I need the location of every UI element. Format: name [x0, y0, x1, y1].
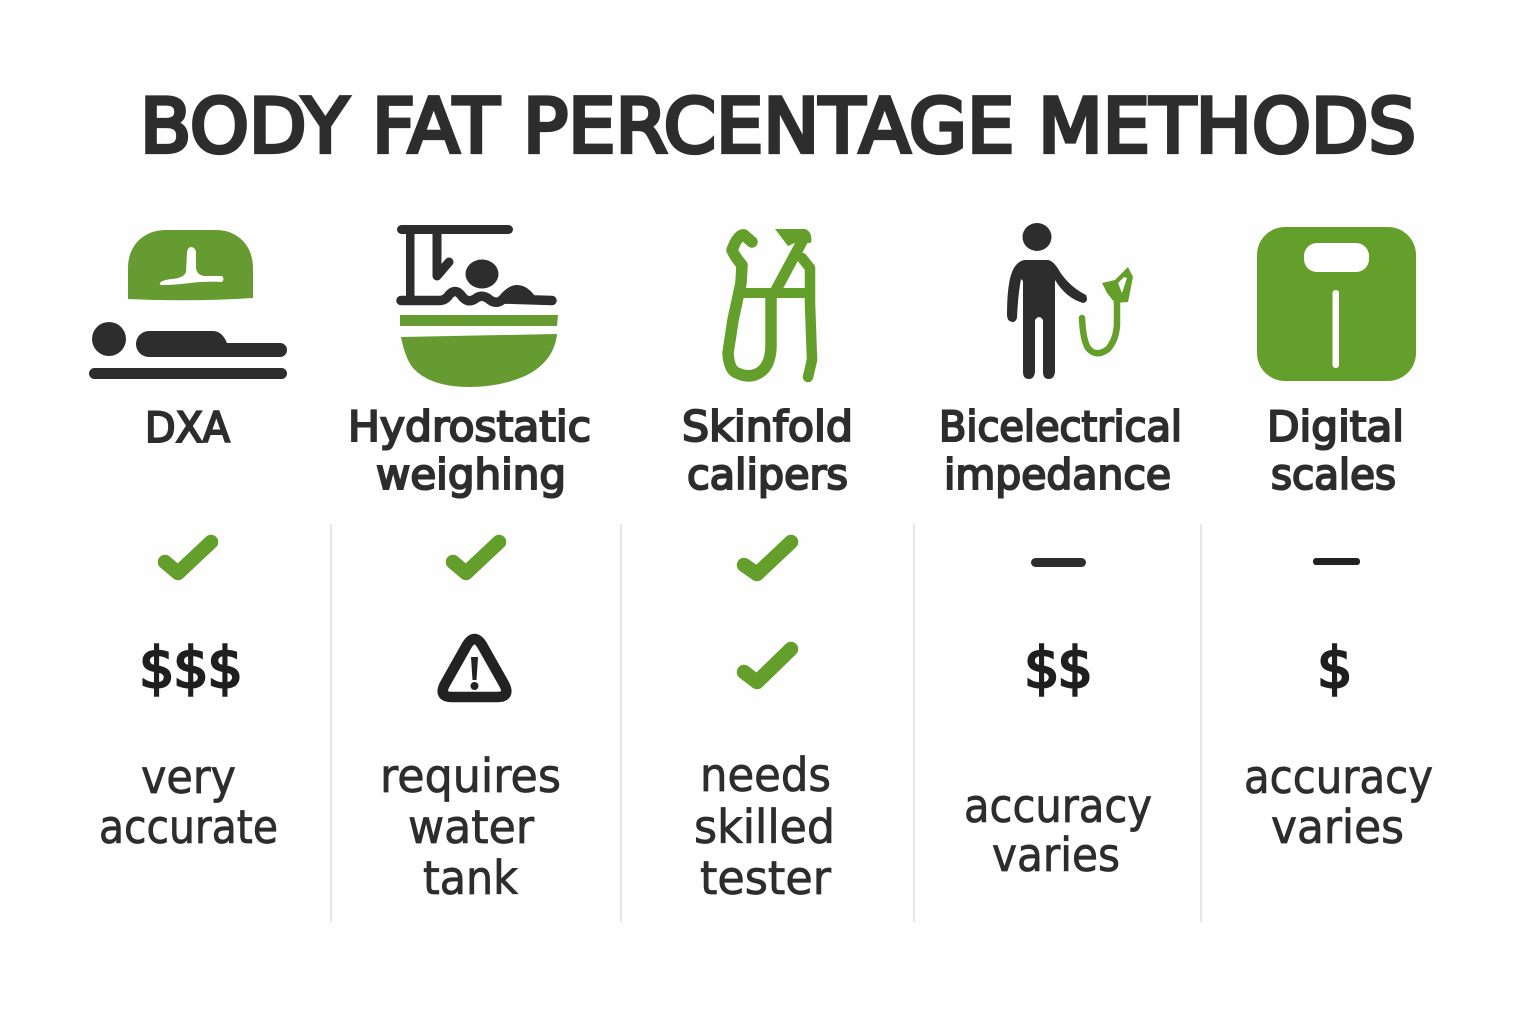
- icon: dash bioelectrical: [1031, 558, 1086, 567]
- note: very accurate: [99, 750, 278, 854]
- heading: Hydrostatic weighing: weighing: [376, 450, 566, 499]
- heading: Skinfold calipers: calipers: [687, 450, 848, 499]
- heading: Bicelectrical impedance: impedance: [944, 450, 1171, 499]
- note: accuracy varies digital: [1244, 750, 1433, 854]
- icon: check cost calipers: [744, 649, 791, 682]
- note: accuracy varies bioelectrical: accuracy: [964, 779, 1152, 833]
- note: accuracy varies bioelectrical: varies: [992, 828, 1120, 882]
- title: BODY FAT PERCENTAGE METHODS: [140, 82, 1416, 170]
- cost: one dollar: $: [1317, 636, 1353, 701]
- heading: Hydrostatic weighing: Hydrostatic: [348, 402, 591, 451]
- heading: Digital scales: [1267, 402, 1404, 499]
- icon: skinfold calipers: [728, 229, 812, 377]
- icon: check DXA: [165, 542, 211, 573]
- icon: check hydrostatic: [453, 542, 499, 573]
- note: requires water tank: [380, 749, 561, 905]
- cost: three dollars: $$$: [139, 636, 243, 701]
- heading: Hydrostatic weighing: [348, 402, 591, 499]
- note: accuracy varies bioelectrical: [964, 779, 1152, 882]
- note: requires water tank: water: [408, 800, 534, 854]
- note: requires water tank: requires: [380, 749, 561, 803]
- note: accuracy varies digital: varies: [1271, 800, 1404, 854]
- note: very accurate: very: [141, 750, 236, 804]
- heading: Bicelectrical impedance: Bicelectrical: [939, 402, 1182, 451]
- cost: two dollars: $$: [1024, 636, 1093, 701]
- note: needs skilled tester: tester: [700, 851, 831, 905]
- icon: check calipers: [744, 542, 791, 574]
- note: very accurate: accurate: [99, 800, 278, 854]
- heading: Digital scales: Digital: [1267, 402, 1404, 451]
- note: needs skilled tester: needs: [700, 748, 831, 802]
- note: accuracy varies digital: accuracy: [1244, 750, 1433, 804]
- note: needs skilled tester: skilled: [694, 800, 835, 854]
- heading: DXA: DXA: [145, 403, 230, 452]
- heading: Skinfold calipers: Skinfold: [682, 402, 853, 451]
- note: requires water tank: tank: [423, 851, 518, 905]
- icon: hydrostatic tank: [397, 225, 558, 387]
- heading: Digital scales: scales: [1271, 450, 1396, 499]
- icon: warning triangle: [443, 639, 506, 697]
- icon: DXA scanner: [89, 230, 287, 379]
- note: needs skilled tester: [694, 748, 835, 905]
- icon: digital scale: [1257, 227, 1416, 381]
- icon: dash digital: [1313, 558, 1360, 565]
- icon: bioelectrical impedance person: [1007, 223, 1133, 379]
- heading: Skinfold calipers: [682, 402, 853, 499]
- heading: Bicelectrical impedance: [939, 402, 1182, 499]
